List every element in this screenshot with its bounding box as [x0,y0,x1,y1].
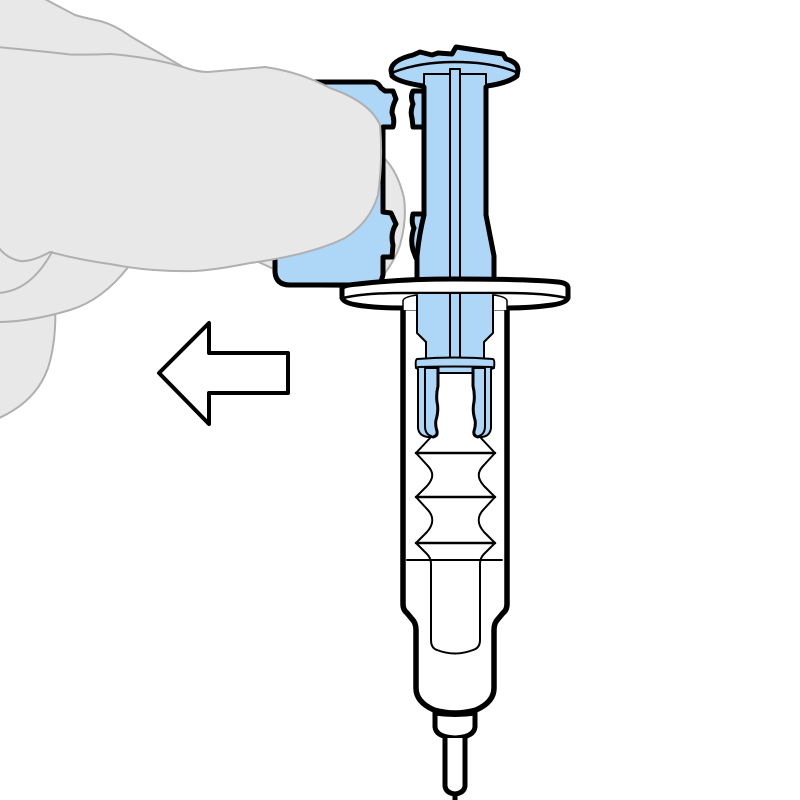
back of hand [0,0,183,120]
plunger stopper bellows [407,437,502,654]
plunger head [391,47,518,86]
right inner clip tabs [411,91,424,258]
needle [445,738,465,794]
index finger [0,47,381,271]
plunger rod [417,69,494,282]
middle finger [0,100,140,322]
needle tip [452,794,458,800]
syringe barrel [403,296,507,713]
finger flange [342,279,568,308]
needle hub [435,713,475,738]
lower finger [0,200,55,419]
back finger behind clip [250,158,405,287]
knuckle crease [0,252,52,293]
rod inside barrel [403,294,507,360]
arrow pointing left [159,323,288,424]
blue pull clip [275,82,396,285]
hand with fingers [0,0,381,419]
plunger clip arms [416,358,494,437]
